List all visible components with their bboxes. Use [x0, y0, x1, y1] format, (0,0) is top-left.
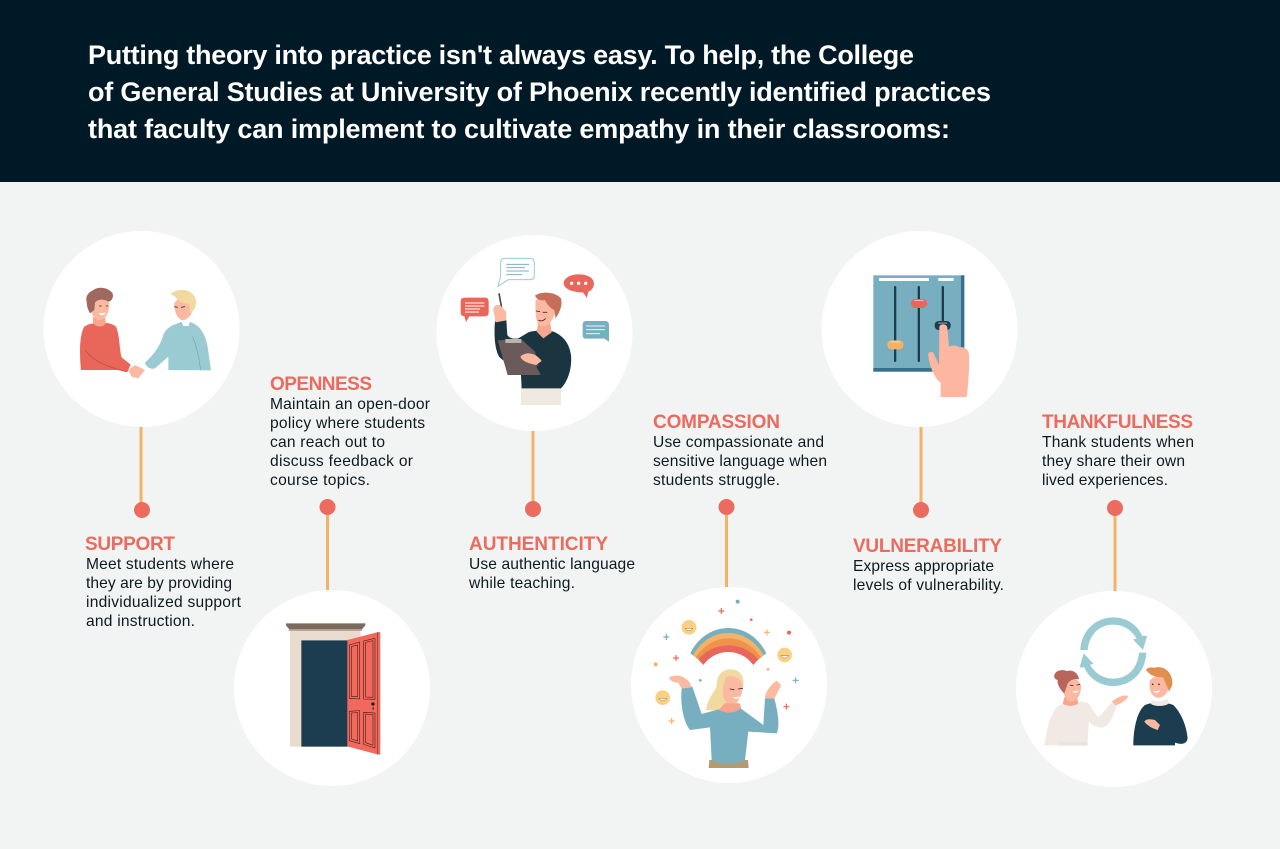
connector line	[920, 427, 922, 510]
text block	[853, 558, 1004, 594]
header band with intro text	[0, 0, 1280, 182]
panel: vulnerability	[822, 231, 1018, 594]
panel: compassion	[631, 412, 827, 783]
circle and icon: two people with cycle arrows	[1016, 591, 1212, 787]
connector line	[725, 507, 728, 588]
connector dot	[913, 502, 929, 518]
text block: students struggle.	[653, 472, 780, 489]
connector line	[532, 431, 534, 509]
text block: Meet students where	[86, 556, 234, 573]
circle and icon: handshake	[44, 231, 240, 427]
text block: individualized support	[86, 594, 242, 611]
text block: Use compassionate and	[653, 434, 824, 451]
text block: lived experiences.	[1042, 472, 1168, 489]
connector line	[1114, 508, 1116, 591]
heading: COMPASSION	[653, 412, 780, 433]
text block	[86, 556, 242, 630]
text block: Use authentic language	[469, 556, 635, 573]
text block: sensitive language when	[653, 453, 827, 470]
connector dot	[525, 501, 541, 517]
connector dot	[134, 502, 150, 518]
connector line	[326, 507, 329, 591]
connector dot	[320, 499, 336, 515]
text block	[1042, 434, 1194, 489]
text block: and instruction.	[86, 613, 195, 630]
text block: Thank students when	[1042, 434, 1194, 451]
heading: SUPPORT	[85, 534, 175, 555]
text block: while teaching.	[468, 575, 575, 592]
circle and icon: woman with rainbow	[631, 587, 827, 783]
text block	[653, 434, 827, 489]
header band with intro text: Putting theory into practice isn't always easy. To help, the College	[88, 40, 914, 70]
text block: discuss feedback or	[270, 453, 413, 470]
circle and icon: open door	[234, 590, 430, 786]
heading: VULNERABILITY	[853, 536, 1002, 557]
connector line	[140, 427, 142, 510]
text block: Express appropriate	[853, 558, 994, 575]
text block: they are by providing	[86, 575, 232, 592]
text block	[270, 396, 430, 489]
panel: authenticity	[436, 235, 635, 592]
heading: OPENNESS	[270, 374, 372, 395]
text block: can reach out to	[270, 434, 385, 451]
connector dot	[1107, 500, 1123, 516]
heading: THANKFULNESS	[1042, 412, 1193, 433]
panel: thankfulness	[1016, 412, 1212, 787]
circle and icon: slider controls with hand	[822, 231, 1018, 427]
heading: AUTHENTICITY	[469, 534, 608, 555]
circle and icon: teacher with speech bubbles	[436, 235, 632, 431]
text block: course topics.	[270, 472, 370, 489]
text block: levels of vulnerability.	[853, 577, 1004, 594]
connector dot	[718, 499, 734, 515]
header band with intro text: that faculty can implement to cultivate empathy in their classrooms:	[88, 114, 950, 144]
panel: openness	[234, 374, 430, 786]
header band with intro text: of General Studies at University of Phoenix recently identified practices	[88, 77, 991, 107]
text block: Maintain an open-door	[270, 396, 430, 413]
panel: support	[44, 231, 242, 630]
text block: they share their own	[1042, 453, 1185, 470]
text block	[468, 556, 635, 592]
text block: policy where students	[270, 415, 425, 432]
